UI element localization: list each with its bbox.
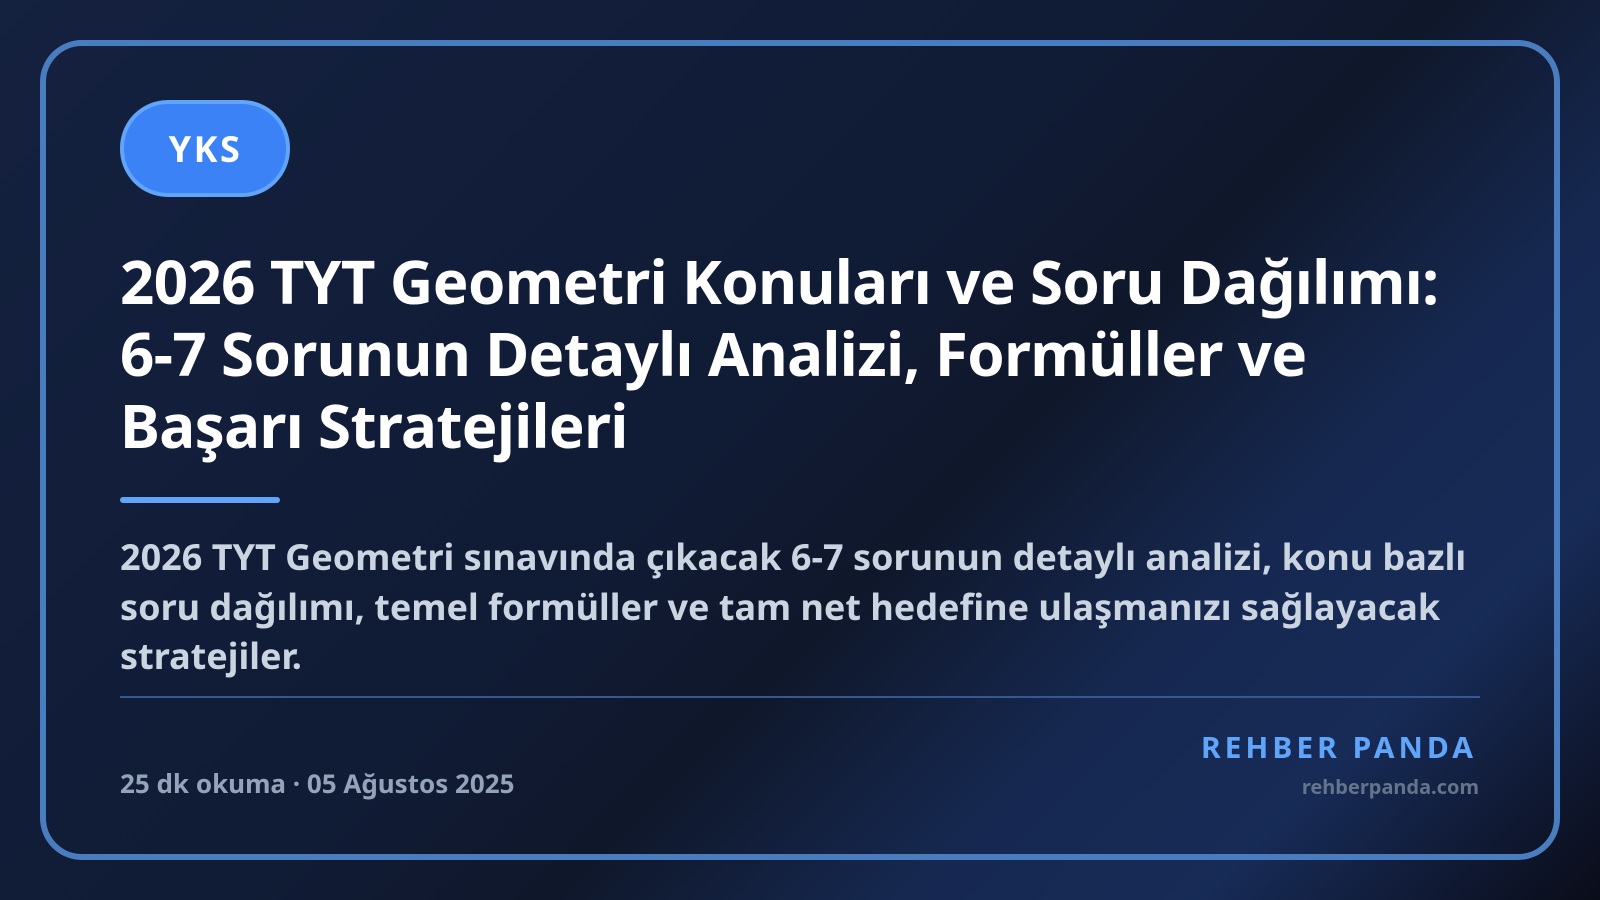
brand name: REHBER PANDA — [1201, 726, 1477, 767]
website: rehberpanda.com — [1302, 773, 1479, 800]
reading time and date: 25 dk okuma · 05 Ağustos 2025 — [120, 765, 515, 801]
description: stratejiler. — [120, 631, 302, 680]
accent rule — [120, 497, 280, 503]
title — [120, 240, 1438, 466]
title: 2026 TYT Geometri Konuları ve Soru Dağılımı: — [120, 240, 1438, 322]
category badge: YKS — [169, 124, 242, 173]
category badge — [120, 100, 290, 197]
footer divider — [120, 696, 1480, 698]
title: Başarı Stratejileri — [120, 384, 628, 466]
description — [120, 532, 1466, 680]
title: 6-7 Sorunun Detaylı Analizi, Formüller ve — [120, 312, 1307, 394]
description: 2026 TYT Geometri sınavında çıkacak 6-7 sorunun detaylı analizi, konu bazlı — [120, 532, 1466, 581]
description: soru dağılımı, temel formüller ve tam net hedefine ulaşmanızı sağlayacak — [120, 582, 1440, 631]
